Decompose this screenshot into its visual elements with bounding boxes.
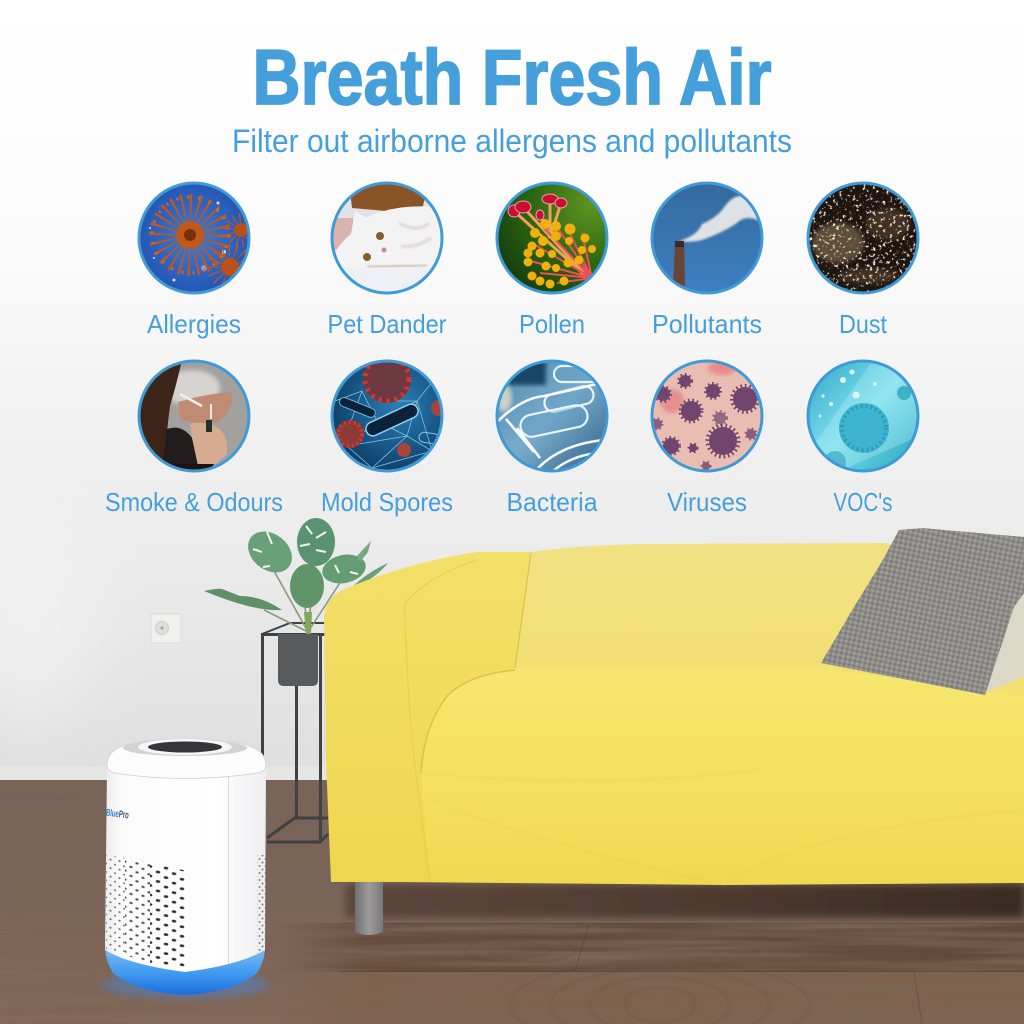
metal stand <box>262 623 328 842</box>
label: dust: Dust <box>839 309 888 339</box>
background wall <box>0 0 1024 790</box>
side air vents <box>257 855 266 954</box>
label: pollutants: Pollutants <box>652 309 762 339</box>
label: pollen: Pollen <box>519 309 585 339</box>
icon: viruses <box>651 360 763 472</box>
sofa seat cushion <box>400 667 1024 885</box>
label: allergies: Allergies <box>147 309 241 339</box>
icon: pollutants <box>651 182 763 294</box>
icon: mold spores <box>331 355 447 472</box>
label: mold spores: Mold Spores <box>321 487 453 517</box>
label: smoke and odours: Smoke & Odours <box>105 487 283 517</box>
wood floor <box>0 780 1024 1024</box>
icon: bacteria <box>496 360 608 472</box>
plant on metal stand <box>204 518 388 842</box>
sofa leg <box>355 880 383 935</box>
sofa back <box>500 543 1024 720</box>
skirting board <box>0 766 330 780</box>
sofa arm <box>324 552 531 882</box>
brand logo: BluePro <box>105 808 129 821</box>
control display <box>148 742 222 752</box>
blue light base <box>105 948 265 995</box>
plant pot <box>278 634 318 686</box>
icon: smoke and odours <box>138 360 250 472</box>
yellow sofa <box>324 543 1024 935</box>
title: Breath Fresh Air <box>252 35 772 121</box>
icon: dust <box>807 182 919 294</box>
blue floor glow <box>101 971 269 999</box>
icon: pollen <box>496 182 608 294</box>
air purifier <box>101 739 269 999</box>
front air vents <box>106 855 187 969</box>
icon: pet dander <box>331 182 443 294</box>
plant leaves <box>204 518 388 634</box>
subtitle: Filter out airborne allergens and pollutants <box>232 123 792 159</box>
grey checked pillow <box>821 528 1024 695</box>
wall socket <box>151 614 181 643</box>
label: VOCs: VOC's <box>834 487 892 517</box>
label: pet dander: Pet Dander <box>328 309 447 339</box>
label: bacteria: Bacteria <box>506 487 598 517</box>
back cushion <box>985 590 1024 692</box>
purifier body <box>105 768 266 972</box>
label: viruses: Viruses <box>667 487 747 517</box>
icon: allergies <box>138 182 252 294</box>
icon: VOCs <box>807 360 919 473</box>
sofa fabric folds <box>421 770 1024 885</box>
top cap <box>107 739 266 778</box>
plant stems <box>264 550 345 632</box>
